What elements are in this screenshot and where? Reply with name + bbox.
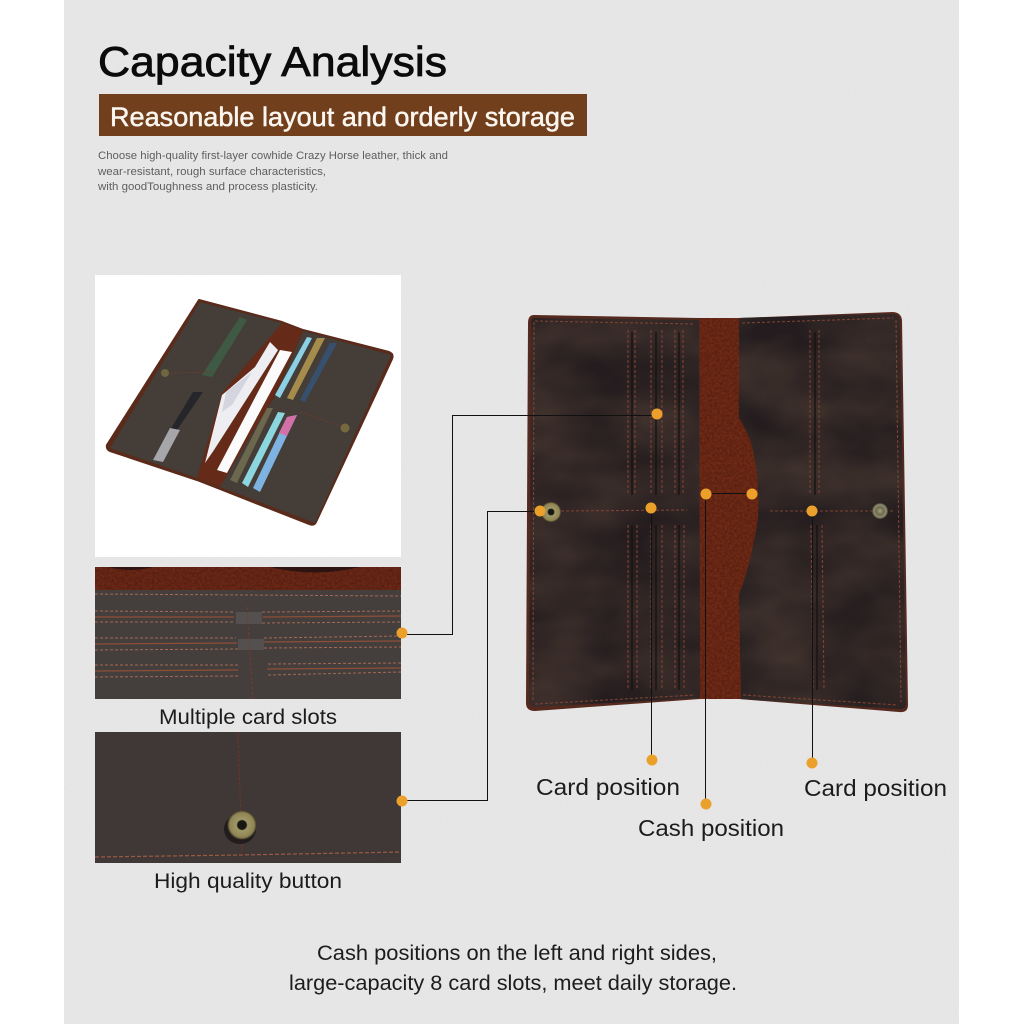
icon: thumbnail right snap (340, 424, 350, 432)
caption: multiple card slots: Multiple card slots (159, 706, 337, 729)
icon: thumbnail left snap (161, 369, 169, 377)
suede spine and cash pocket (700, 318, 758, 699)
label: cash position: Cash position (638, 815, 784, 841)
cards (153, 317, 337, 492)
photo: multiple card slots detail (95, 567, 401, 699)
leader line: card slots callout (402, 416, 657, 634)
subtitle banner: Reasonable layout and orderly storage (110, 102, 575, 132)
label: left card position: Card position (536, 774, 680, 800)
leader line: cash position (706, 494, 752, 804)
suede spine (197, 323, 303, 487)
callout dots (396, 408, 818, 810)
left flap (110, 302, 282, 478)
right pockets (220, 331, 391, 523)
icon: left snap button (541, 502, 561, 522)
title: Capacity Analysis (98, 38, 447, 85)
closing text block (289, 942, 737, 995)
intro text block: with goodToughness and process plasticity. (97, 181, 318, 193)
intro text block: Choose high-quality first-layer cowhide Crazy Horse leather, thick and (98, 150, 448, 162)
photo: high quality button detail (95, 732, 401, 863)
leader line: right card position (812, 511, 814, 763)
label: right card position: Card position (804, 775, 947, 801)
photo: wallet in perspective with cards (95, 275, 401, 557)
left panel (529, 318, 700, 707)
photo: open wallet (526, 312, 908, 712)
intro text block (97, 150, 448, 193)
icon: right snap stud (872, 503, 888, 519)
leader line: left card position (650, 508, 652, 760)
stitching (533, 318, 901, 705)
closing text block: Cash positions on the left and right sides, (317, 942, 717, 965)
subtitle banner (99, 94, 587, 136)
icon: brass snap button (228, 810, 256, 840)
wallet body (107, 300, 393, 525)
caption: high quality button: High quality button (154, 870, 342, 893)
right panel (739, 314, 906, 709)
leader line: button callout (402, 512, 540, 800)
cash notes (205, 342, 292, 473)
closing text block: large-capacity 8 card slots, meet daily storage. (289, 972, 737, 995)
intro text block: wear-resistant, rough surface characteristics, (97, 166, 326, 178)
